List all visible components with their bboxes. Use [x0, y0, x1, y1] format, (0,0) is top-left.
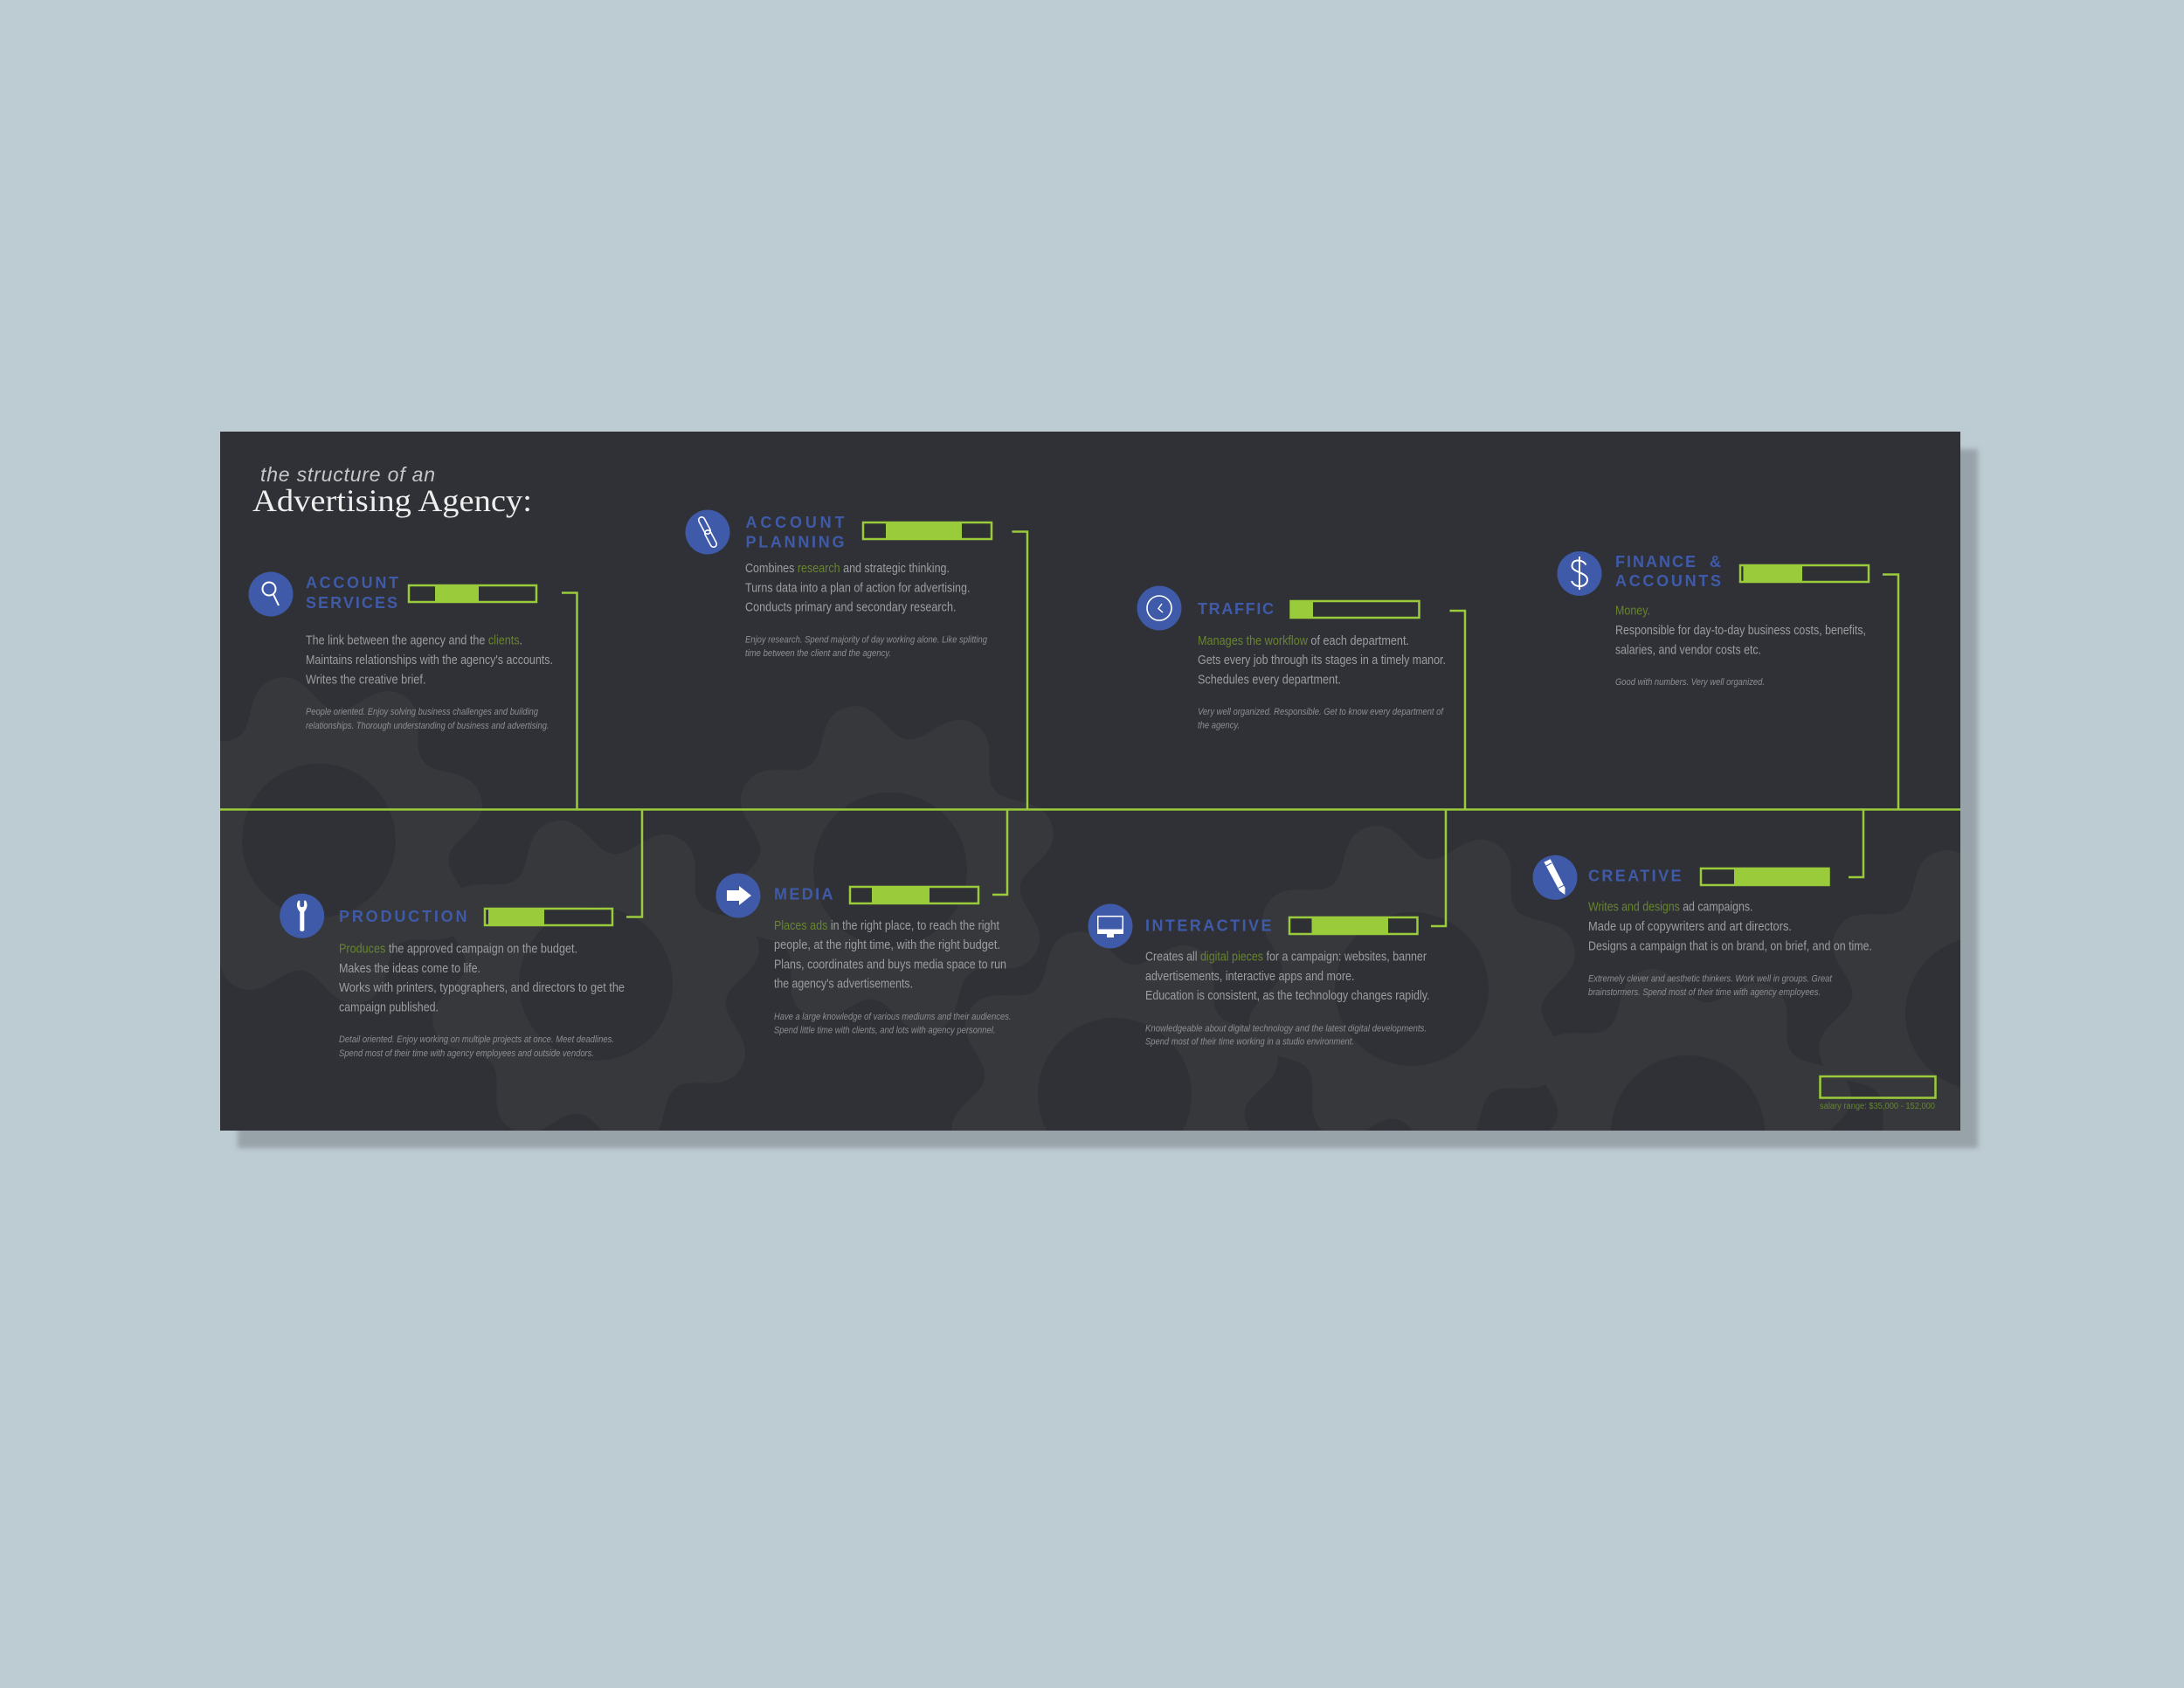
- panel: finance and accounts: [1557, 551, 1898, 809]
- background gears: [255, 554, 1602, 947]
- traits: the agency.: [1198, 720, 1240, 730]
- heading: ACCOUNTS: [1615, 572, 1721, 590]
- traits: Spend most of their time with agency employees and outside vendors.: [339, 1048, 594, 1059]
- connector: [992, 809, 1007, 895]
- heading: PRODUCTION: [339, 908, 467, 925]
- description: The link between the agency and the clients.: [306, 633, 522, 648]
- salary bar: [409, 585, 536, 602]
- icon: pencil: [1532, 855, 1578, 900]
- salary bar: [850, 887, 978, 903]
- heading: SERVICES: [306, 594, 397, 612]
- traits: [306, 707, 549, 731]
- heading: ACCOUNT: [746, 514, 844, 531]
- panel: account services: [248, 571, 577, 809]
- icon: dollar: [1557, 551, 1602, 596]
- traits: relationships. Thorough understanding of business and advertising.: [306, 721, 549, 731]
- subtitle: the structure of an: [260, 463, 435, 486]
- connector: [1450, 611, 1465, 809]
- connector: [1431, 809, 1446, 926]
- panel: interactive: [1089, 809, 1446, 1047]
- description: campaign published.: [339, 1000, 439, 1015]
- description: Gets every job through its stages in a timely manor.: [1198, 653, 1446, 668]
- description: Makes the ideas come to life.: [339, 961, 480, 976]
- heading: INTERACTIVE: [1145, 917, 1272, 935]
- traits: Enjoy research. Spend majority of day working alone. Like splitting: [745, 634, 988, 645]
- traits: Very well organized. Responsible. Get to know every department of: [1198, 707, 1444, 717]
- description: [1198, 633, 1446, 687]
- description: salaries, and vendor costs etc.: [1615, 643, 1761, 657]
- heading: CREATIVE: [1588, 867, 1681, 884]
- description: Places ads in the right place, to reach the right: [774, 918, 1000, 933]
- horizontal timeline: [220, 808, 1960, 811]
- description: advertisements, interactive apps and more.: [1145, 969, 1354, 984]
- traits: Extremely clever and aesthetic thinkers. Work well in groups. Great: [1588, 973, 1833, 984]
- salary bar: [1740, 565, 1869, 582]
- description: people, at the right time, with the right budget.: [774, 937, 1000, 952]
- description: Turns data into a plan of action for advertising.: [745, 580, 970, 596]
- description: Education is consistent, as the technology changes rapidly.: [1145, 988, 1429, 1003]
- main dark panel: [220, 432, 1960, 1131]
- traits: [1588, 973, 1833, 998]
- icon: clock: [1137, 585, 1181, 631]
- traits: brainstormers. Spend most of their time with agency employees.: [1588, 987, 1821, 998]
- connector: [562, 592, 577, 809]
- traits: [339, 1034, 614, 1059]
- traits: People oriented. Enjoy solving business challenges and building: [306, 707, 539, 717]
- description: [774, 918, 1006, 991]
- icon: magnifying glass: [248, 571, 294, 617]
- description: Maintains relationships with the agency's accounts.: [306, 653, 553, 668]
- description: Writes and designs ad campaigns.: [1588, 900, 1752, 914]
- panel: media: [716, 809, 1012, 1036]
- description: Creates all digital pieces for a campaign: websites, banner: [1145, 949, 1427, 965]
- description: Conducts primary and secondary research.: [745, 599, 956, 615]
- description: [1588, 900, 1872, 954]
- connector: [1849, 809, 1863, 877]
- traits: [1198, 707, 1444, 730]
- description: Manages the workflow of each department.: [1198, 633, 1409, 648]
- description: [1615, 603, 1866, 657]
- salary bar: [1289, 917, 1417, 934]
- icon: chain link: [685, 510, 730, 554]
- description: [306, 633, 553, 687]
- panel: production: [280, 809, 642, 1059]
- description: Combines research and strategic thinking.: [745, 561, 950, 576]
- legend: salary range: [1820, 1076, 1936, 1111]
- salary bar: [485, 909, 612, 925]
- traits: [745, 634, 988, 659]
- traits: [1145, 1024, 1427, 1047]
- heading: [746, 514, 844, 550]
- traits: Knowledgeable about digital technology and the latest digital developments.: [1145, 1024, 1427, 1034]
- description: [745, 561, 970, 615]
- description: Schedules every department.: [1198, 673, 1341, 687]
- icon: wrench: [280, 894, 324, 938]
- description: [1145, 949, 1429, 1003]
- salary bar: [863, 522, 992, 539]
- traits: time between the client and the agency.: [745, 648, 891, 659]
- heading: PLANNING: [746, 533, 844, 550]
- heading: TRAFFIC: [1198, 600, 1274, 618]
- salary bar: [1291, 601, 1419, 618]
- description: Responsible for day-to-day business costs, benefits,: [1615, 623, 1866, 638]
- connector: [1012, 531, 1027, 809]
- description: [339, 942, 625, 1015]
- panel drop shadow: [238, 449, 1978, 1148]
- title: [252, 463, 532, 518]
- description: Writes the creative brief.: [306, 673, 426, 687]
- description: Plans, coordinates and buys media space to run: [774, 958, 1006, 972]
- heading: ACCOUNT: [306, 574, 398, 591]
- heading: [1615, 553, 1721, 590]
- icon: monitor: [1089, 903, 1132, 949]
- heading: FINANCE &: [1615, 553, 1721, 571]
- connector: [1883, 575, 1898, 809]
- traits: Good with numbers. Very well organized.: [1615, 677, 1765, 688]
- panel: account planning: [685, 510, 1027, 809]
- description: Produces the approved campaign on the budget.: [339, 942, 577, 956]
- main heading: Advertising Agency:: [252, 483, 532, 518]
- traits: Detail oriented. Enjoy working on multiple projects at once. Meet deadlines.: [339, 1034, 614, 1045]
- traits: Spend most of their time working in a studio environment.: [1145, 1036, 1354, 1047]
- legend: salary range: salary range: $35,000 - 152,000: [1820, 1102, 1935, 1111]
- heading: MEDIA: [774, 886, 833, 903]
- description: Made up of copywriters and art directors.: [1588, 919, 1792, 934]
- traits: Spend little time with clients, and lots with agency personnel.: [774, 1026, 996, 1036]
- description: Designs a campaign that is on brand, on brief, and on time.: [1588, 938, 1872, 954]
- description: the agency's advertisements.: [774, 977, 913, 991]
- traits: [774, 1012, 1012, 1036]
- description: Works with printers, typographers, and directors to get the: [339, 980, 625, 995]
- salary bar: [1701, 868, 1829, 885]
- traits: Have a large knowledge of various mediums and their audiences.: [774, 1012, 1012, 1022]
- panel: creative: [1532, 809, 1872, 998]
- icon: arrow: [716, 874, 760, 917]
- heading: [306, 574, 398, 612]
- connector: [626, 809, 642, 917]
- panel: traffic: [1137, 585, 1465, 809]
- description: Money.: [1615, 603, 1650, 619]
